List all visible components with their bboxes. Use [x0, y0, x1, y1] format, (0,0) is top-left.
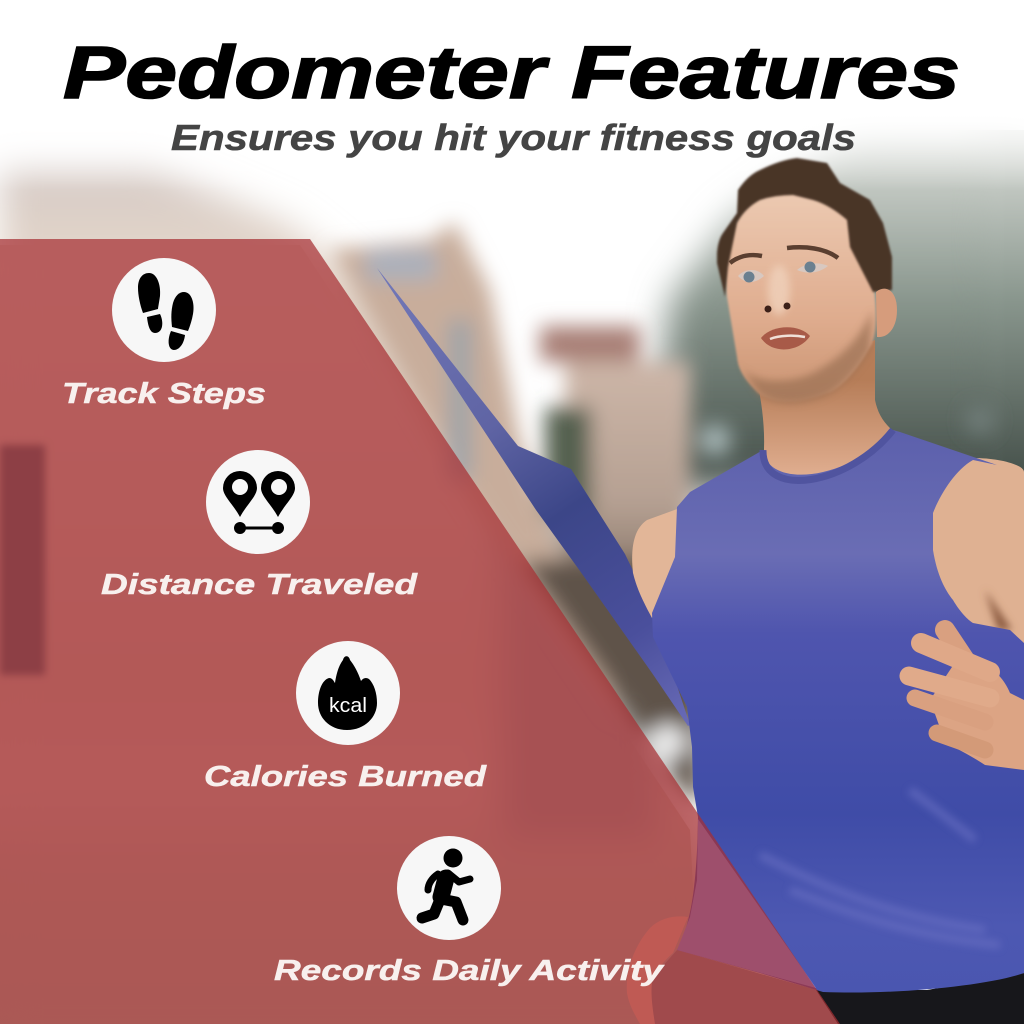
runner: neck: [758, 340, 897, 483]
runner: hand: [909, 630, 1024, 770]
label: records daily activity: Records Daily Activity: [274, 955, 665, 987]
feature: distance traveled: [101, 450, 419, 601]
runner: shirt fold highlights: [760, 790, 1000, 945]
red diagonal panel: [0, 239, 840, 1024]
feature: track steps: [62, 258, 266, 410]
label: distance traveled: Distance Traveled: [101, 569, 419, 601]
title: Pedometer Features: [63, 31, 960, 114]
runner: trailing hand seen through panel: [627, 916, 688, 1024]
runner: black shorts: [816, 973, 1024, 1024]
icon: kcal flame: kcal: [329, 695, 367, 717]
runner: face: [726, 183, 876, 402]
icon: runner: [397, 836, 501, 940]
runner: eyes, nose and mouth: [730, 247, 838, 349]
feature: calories burned: [204, 641, 488, 793]
runner: shorts seen through panel: [645, 950, 839, 1024]
label: track steps: Track Steps: [62, 378, 266, 410]
runner: near arm: [920, 458, 1024, 650]
runner: blue tank top: [652, 430, 1024, 993]
icon: footprints: [112, 258, 216, 362]
runner: [627, 158, 1024, 1024]
subtitle: Ensures you hit your fitness goals: [171, 117, 856, 158]
runner: ear: [876, 289, 897, 337]
runner: far arm: [632, 508, 682, 618]
runner: hair: [717, 158, 892, 297]
runner: shirt collar: [763, 430, 893, 480]
runner: armpit shadow: [985, 590, 1012, 630]
runner: shirt seen through panel: [677, 819, 816, 988]
feature: records daily activity: [274, 836, 665, 987]
blue speed streak: [377, 268, 690, 726]
icon: map pins: [206, 450, 310, 554]
runner: beard: [738, 310, 872, 403]
icon: kcal flame: [296, 641, 400, 745]
label: calories burned: Calories Burned: [204, 761, 488, 793]
